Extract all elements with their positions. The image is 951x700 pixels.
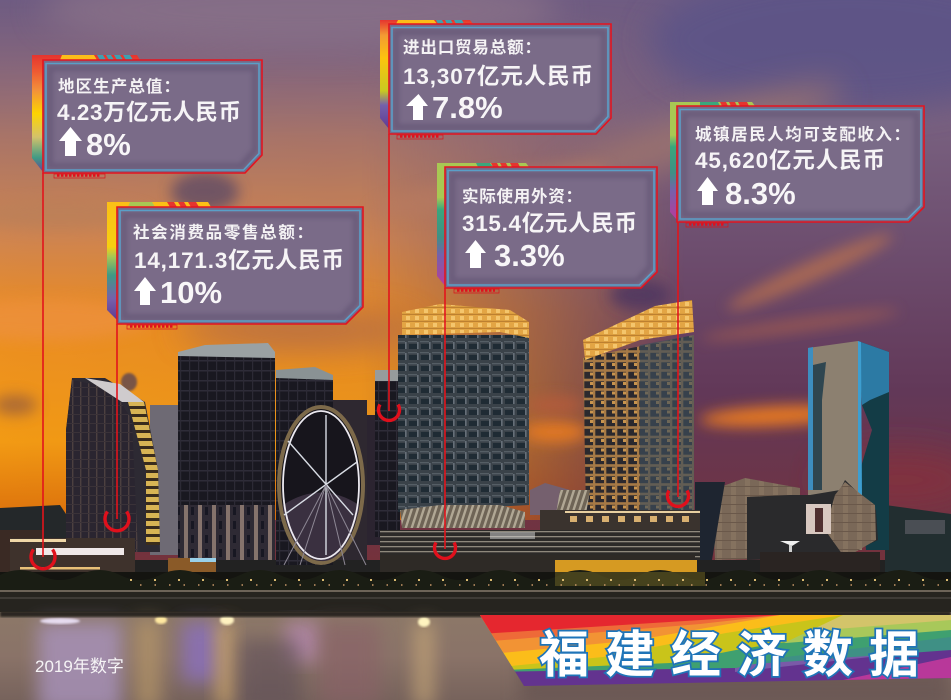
callout leader lines and target rings <box>31 134 689 569</box>
skyline: distant hills <box>0 483 951 590</box>
building: blue and tan tower <box>808 341 889 550</box>
callout: regional GDP <box>32 55 262 178</box>
callout: disposable income: 8.3% <box>725 176 796 211</box>
callout: trade volume <box>380 20 611 139</box>
ferris wheel <box>279 407 366 565</box>
building: riverside mall <box>380 490 700 580</box>
building: rear tower <box>276 367 367 565</box>
title banner: rainbow ribbon <box>480 615 951 686</box>
callout: retail sales: 社会消费品零售总额： <box>133 222 313 242</box>
callout: trade volume: 13,307亿元人民币 <box>403 64 593 89</box>
caption: year: 2019年数字 <box>35 657 124 676</box>
building: grey tower with golden crown <box>398 304 529 512</box>
building: slim tower behind <box>367 370 400 545</box>
trees and embankment <box>0 570 951 614</box>
callout: regional GDP: 8% <box>86 127 131 162</box>
callout: retail sales: 10% <box>160 275 222 310</box>
river with reflections <box>0 611 951 700</box>
background: dusk sky <box>0 0 951 560</box>
callout: disposable income <box>670 102 924 227</box>
waterfront low buildings <box>0 530 216 575</box>
callout: foreign investment: 3.3% <box>494 238 565 273</box>
callout: disposable income: 45,620亿元人民币 <box>695 148 885 173</box>
callout: trade volume: 进出口贸易总额： <box>403 38 541 57</box>
callout: foreign investment: 315.4亿元人民币 <box>462 211 637 236</box>
callout: foreign investment <box>437 163 657 293</box>
building: dark tall tower <box>178 343 275 560</box>
callout: disposable income: 城镇居民人均可支配收入： <box>695 124 910 144</box>
callout: retail sales: 14,171.3亿元人民币 <box>134 248 344 273</box>
callout: regional GDP: 地区生产总值： <box>58 77 180 96</box>
callout: foreign investment: 实际使用外资： <box>462 186 582 206</box>
callout: regional GDP: 4.23万亿元人民币 <box>57 100 241 125</box>
title text: 福建经济数据 <box>539 627 935 683</box>
building: hotel tower <box>583 300 694 510</box>
callout: retail sales <box>107 202 363 329</box>
callout: trade volume: 7.8% <box>432 90 503 125</box>
building: curved gold tower <box>66 378 178 555</box>
building: shopping plaza <box>695 478 880 585</box>
